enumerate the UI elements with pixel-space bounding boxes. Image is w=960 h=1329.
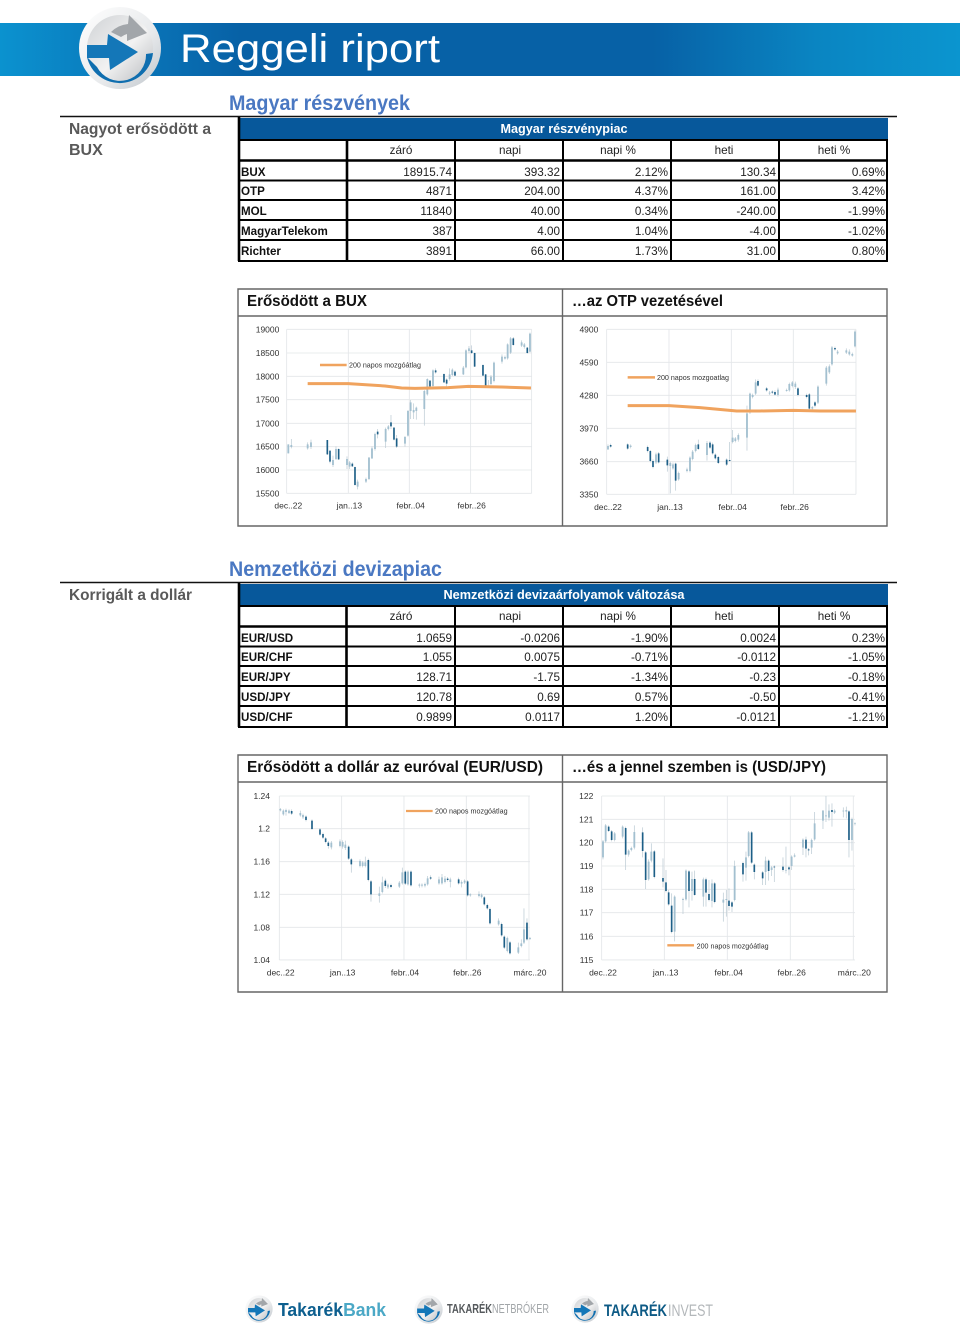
- footer logos: [245, 1295, 713, 1324]
- legend: 200-day moving average: [320, 361, 421, 370]
- table: Magyar részvénypiac: napi: [499, 144, 521, 157]
- table: FX rates: -0.41%: [848, 691, 885, 704]
- chart: EUR/USD candlesticks: márc..20: [513, 968, 547, 978]
- section: Hungarian equities: [60, 92, 897, 261]
- table: Magyar részvénypiac: 130.34: [740, 166, 776, 179]
- table: FX rates: -0.23: [749, 671, 776, 684]
- chart: OTP candlesticks: 4590: [579, 357, 599, 367]
- table: FX rates: -1.90%: [631, 632, 668, 645]
- table: Magyar részvénypiac: heti %: [818, 144, 850, 157]
- table: Magyar részvénypiac: MagyarTelekom: [241, 225, 328, 238]
- table: FX rates: -1.21%: [848, 711, 885, 724]
- logo: Takarék Invest: [571, 1295, 713, 1323]
- table: FX rates: Nemzetközi devizaárfolyamok változása: [444, 588, 686, 602]
- table: FX rates: -0.18%: [848, 671, 885, 684]
- chart: EUR/USD candlesticks: jan..13: [329, 968, 356, 978]
- panel: BUX and OTP charts: [238, 289, 887, 526]
- table: Magyar részvénypiac: 66.00: [531, 245, 560, 258]
- chart: USD/JPY candlesticks: 117: [580, 908, 594, 918]
- chart: OTP candlesticks: febr..26: [780, 502, 809, 512]
- logo: Takarék Invest: TAKARÉK: [604, 1301, 668, 1320]
- chart: BUX candlesticks: dec..22: [274, 501, 303, 511]
- table: Magyar részvénypiac: -240.00: [736, 205, 776, 218]
- table: FX rates: EUR/USD: [241, 632, 293, 645]
- logo: Takarék Invest: INVEST: [668, 1301, 713, 1320]
- chart: EUR/USD candlesticks: 1.24: [253, 791, 270, 801]
- table: Magyar részvénypiac: 31.00: [747, 245, 776, 258]
- table: FX rates: 0.9899: [416, 711, 452, 724]
- table: Magyar részvénypiac: [238, 117, 888, 261]
- chart: EUR/USD candlesticks: dec..22: [267, 968, 295, 978]
- logo: TakarékBank: TakarékBank: [278, 1300, 387, 1320]
- chart title: OTP: …az OTP vezetésével: [572, 293, 723, 310]
- table: FX rates: 0.0075: [524, 651, 560, 664]
- table: Magyar részvénypiac: 3.42%: [852, 185, 885, 198]
- chart title: BUX: Erősödött a BUX: [247, 293, 367, 310]
- chart: USD/JPY candlesticks: febr..04: [714, 968, 743, 978]
- chart: OTP candlesticks: 3970: [579, 423, 599, 433]
- table: Magyar részvénypiac: 4.00: [537, 225, 560, 238]
- table: FX rates: záró: [390, 610, 413, 623]
- table: FX rates: USD/CHF: [241, 711, 293, 724]
- table: FX rates: 0.0117: [525, 711, 560, 724]
- chart: OTP candlesticks: 4900: [579, 324, 599, 334]
- table: Magyar részvénypiac: záró: [390, 144, 413, 157]
- table: Magyar részvénypiac: 161.00: [740, 185, 776, 198]
- legend: 200-day moving average: 200 napos mozgóátlag: [349, 361, 421, 370]
- chart: BUX candlesticks: 16500: [256, 442, 280, 452]
- chart: USD/JPY candlesticks: 122: [579, 791, 594, 801]
- chart: EUR/USD candlesticks: 1.2: [258, 824, 270, 834]
- chart title: USD/JPY: …és a jennel szemben is (USD/JPY): [572, 759, 826, 776]
- chart: EUR/USD candlesticks: [253, 791, 547, 978]
- legend: 200-day moving average: [667, 941, 769, 950]
- table: Magyar részvénypiac: Magyar részvénypiac: [500, 122, 628, 136]
- table: Magyar részvénypiac: -4.00: [749, 225, 776, 238]
- side comment: Nagyot erősödött a: [69, 121, 211, 138]
- table: Magyar részvénypiac: BUX: [241, 166, 266, 179]
- chart title: EUR/USD: Erősödött a dollár az euróval (EUR/USD): [247, 759, 543, 776]
- chart: EUR/USD candlesticks: febr..04: [391, 968, 419, 978]
- table: Magyar részvénypiac: 4.37%: [635, 185, 668, 198]
- table: Magyar részvénypiac: heti: [715, 144, 733, 157]
- table: FX rates: -0.50: [749, 691, 776, 704]
- chart: OTP candlesticks: 4280: [579, 390, 599, 400]
- table: Magyar részvénypiac: 11840: [420, 205, 452, 218]
- table: Magyar részvénypiac: 2.12%: [635, 166, 668, 179]
- chart: OTP candlesticks: dec..22: [594, 502, 622, 512]
- table: Magyar részvénypiac: 40.00: [531, 205, 560, 218]
- table: Magyar részvénypiac: -1.99%: [848, 205, 885, 218]
- chart: OTP candlesticks: 3660: [579, 457, 599, 467]
- chart: USD/JPY candlesticks: jan..13: [652, 968, 679, 978]
- chart: BUX candlesticks: 16000: [256, 465, 280, 475]
- legend: 200-day moving average: [628, 373, 729, 382]
- chart: BUX candlesticks: 19000: [256, 324, 280, 334]
- table: Magyar részvénypiac: napi %: [600, 144, 636, 157]
- table: FX rates: 1.0659: [416, 632, 452, 645]
- table: FX rates: USD/JPY: [241, 691, 291, 704]
- table: FX rates: -0.0112: [737, 651, 776, 664]
- table: FX rates: -0.71%: [631, 651, 668, 664]
- table: Magyar részvénypiac: 0.69%: [852, 166, 885, 179]
- table: Magyar részvénypiac: 3891: [426, 245, 452, 258]
- table: FX rates: 0.0024: [740, 632, 776, 645]
- icon: round report logo: [79, 7, 161, 89]
- table: FX rates: -0.0121: [736, 711, 776, 724]
- table: FX rates: 120.78: [416, 691, 452, 704]
- table: FX rates: [238, 583, 888, 727]
- logo: Takarék Netbróker: TAKARÉK: [447, 1301, 492, 1316]
- table: FX rates: 0.69: [537, 691, 560, 704]
- table: FX rates: -1.75: [533, 671, 560, 684]
- table: Magyar részvénypiac: OTP: [241, 185, 265, 198]
- chart: USD/JPY candlesticks: 116: [580, 931, 594, 941]
- table: FX rates: 128.71: [416, 671, 452, 684]
- table: Magyar részvénypiac: 18915.74: [403, 166, 452, 179]
- chart: OTP candlesticks: [579, 324, 856, 512]
- chart: USD/JPY candlesticks: 115: [580, 955, 594, 965]
- side comment: BUX: [69, 142, 103, 159]
- table: Magyar részvénypiac: 0.34%: [635, 205, 668, 218]
- table: Magyar részvénypiac: MOL: [241, 205, 267, 218]
- panel: EUR/USD and USD/JPY charts: [238, 755, 887, 992]
- table: FX rates: heti: [715, 610, 733, 623]
- chart: USD/JPY candlesticks: dec..22: [589, 968, 617, 978]
- chart: EUR/USD candlesticks: febr..26: [453, 968, 482, 978]
- heading: Magyar részvények: Magyar részvények: [229, 92, 410, 115]
- chart: BUX candlesticks: febr..26: [457, 501, 486, 511]
- table: Magyar részvénypiac: 387: [432, 225, 452, 238]
- chart: BUX candlesticks: 18500: [256, 348, 280, 358]
- chart: BUX candlesticks: 18000: [256, 371, 280, 381]
- table: Magyar részvénypiac: 0.80%: [852, 245, 885, 258]
- table: FX rates: 1.055: [423, 651, 452, 664]
- chart: EUR/USD candlesticks: 1.04: [253, 955, 270, 965]
- table: Magyar részvénypiac: Richter: [241, 245, 281, 258]
- legend: 200-day moving average: 200 napos mozgóátlag: [697, 941, 769, 950]
- table: FX rates: heti %: [818, 610, 850, 623]
- table: Magyar részvénypiac: 204.00: [524, 185, 560, 198]
- table: Magyar részvénypiac: 4871: [426, 185, 452, 198]
- table: FX rates: 1.20%: [635, 711, 668, 724]
- table: FX rates: 0.23%: [852, 632, 885, 645]
- header banner: [0, 7, 960, 89]
- chart: BUX candlesticks: 17000: [256, 418, 280, 428]
- table: FX rates: EUR/CHF: [241, 651, 293, 664]
- logo: TakarékBank: [245, 1295, 387, 1323]
- table: FX rates: -0.0206: [520, 632, 560, 645]
- chart: EUR/USD candlesticks: 1.12: [253, 889, 270, 899]
- chart: USD/JPY candlesticks: 118: [580, 884, 594, 894]
- table: Magyar részvénypiac: 1.73%: [635, 245, 668, 258]
- chart: USD/JPY candlesticks: 120: [579, 838, 594, 848]
- chart: BUX candlesticks: 15500: [256, 488, 280, 498]
- chart: EUR/USD candlesticks: 1.08: [253, 922, 270, 932]
- legend: 200-day moving average: 200 napos mozgoatlag: [657, 373, 729, 382]
- table: FX rates: EUR/JPY: [241, 671, 291, 684]
- chart: BUX candlesticks: jan..13: [336, 501, 362, 511]
- chart: BUX candlesticks: febr..04: [396, 501, 425, 511]
- chart: OTP candlesticks: jan..13: [656, 502, 683, 512]
- logo: Takarék Netbróker: [414, 1295, 549, 1324]
- table: Magyar részvénypiac: -1.02%: [848, 225, 885, 238]
- banner title: Reggeli riport: [180, 27, 440, 71]
- side comment: Korrigált a dollár: [69, 587, 192, 604]
- logo: Takarék Netbróker: NETBRÓKER: [492, 1301, 549, 1316]
- chart: OTP candlesticks: 3350: [579, 489, 599, 499]
- table: FX rates: napi: [499, 610, 521, 623]
- chart: BUX candlesticks: [256, 324, 532, 511]
- table: FX rates: 0.57%: [635, 691, 668, 704]
- legend: 200-day moving average: [406, 807, 508, 816]
- chart: USD/JPY candlesticks: márc..20: [838, 968, 871, 978]
- chart: EUR/USD candlesticks: 1.16: [253, 857, 270, 867]
- chart: USD/JPY candlesticks: 119: [580, 861, 594, 871]
- table: Magyar részvénypiac: 393.32: [524, 166, 560, 179]
- legend: 200-day moving average: 200 napos mozgóátlag: [435, 807, 508, 816]
- chart: USD/JPY candlesticks: 121: [579, 814, 594, 824]
- table: Magyar részvénypiac: 1.04%: [635, 225, 668, 238]
- section: FX market: [60, 558, 897, 727]
- table: FX rates: -1.05%: [848, 651, 885, 664]
- table: FX rates: napi %: [600, 610, 636, 623]
- chart: USD/JPY candlesticks: febr..26: [777, 968, 806, 978]
- chart: BUX candlesticks: 17500: [256, 395, 280, 405]
- chart: OTP candlesticks: febr..04: [718, 502, 747, 512]
- heading: Nemzetközi devizapiac: Nemzetközi devizapiac: [229, 558, 442, 581]
- chart: USD/JPY candlesticks: [579, 791, 871, 978]
- table: FX rates: -1.34%: [631, 671, 668, 684]
